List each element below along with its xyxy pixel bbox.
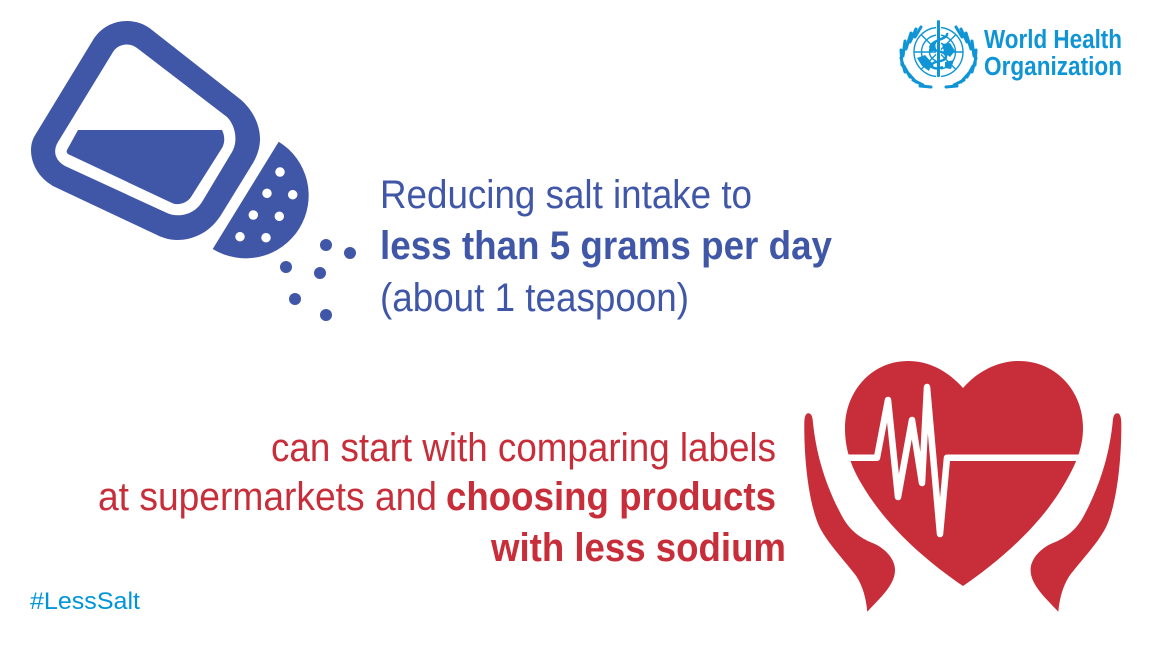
- shaker salt fill: [67, 130, 224, 204]
- logo emblem: [901, 20, 976, 87]
- shaker cap with holes: [213, 142, 309, 258]
- shaker body: [31, 21, 260, 240]
- heartbeat line: [846, 387, 1082, 534]
- continents: [917, 42, 955, 71]
- text block: supermarket advice: choosing products: [446, 475, 776, 519]
- hashtag: #LessSalt: [30, 588, 140, 615]
- text block: salt intake message: Reducing salt intake to: [380, 173, 752, 217]
- text block: supermarket advice: can start with comparing labels: [271, 426, 776, 470]
- logo wordmark: World Health: [984, 26, 1122, 54]
- logo wordmark: [984, 26, 1122, 81]
- staff: [936, 20, 940, 78]
- right hand: [1031, 413, 1121, 612]
- left laurel: [901, 27, 931, 87]
- text block: supermarket advice: [98, 426, 786, 570]
- text block: salt intake message: [380, 173, 833, 320]
- left hand: [804, 413, 895, 612]
- text block: supermarket advice: at supermarkets and: [98, 475, 437, 519]
- logo wordmark: Organization: [984, 53, 1122, 81]
- serpent: [931, 33, 947, 68]
- right laurel: [946, 27, 976, 87]
- heart: [845, 361, 1083, 586]
- icon: heart in hands: [804, 361, 1121, 612]
- logo: World Health Organization: [901, 20, 1122, 87]
- icon: salt shaker: [31, 21, 356, 321]
- globe rings: [914, 28, 963, 76]
- falling salt grains: [280, 239, 356, 321]
- text block: salt intake message: (about 1 teaspoon): [380, 276, 689, 320]
- text block: supermarket advice: with less sodium: [490, 526, 786, 570]
- text block: salt intake message: less than 5 grams per day: [380, 224, 833, 268]
